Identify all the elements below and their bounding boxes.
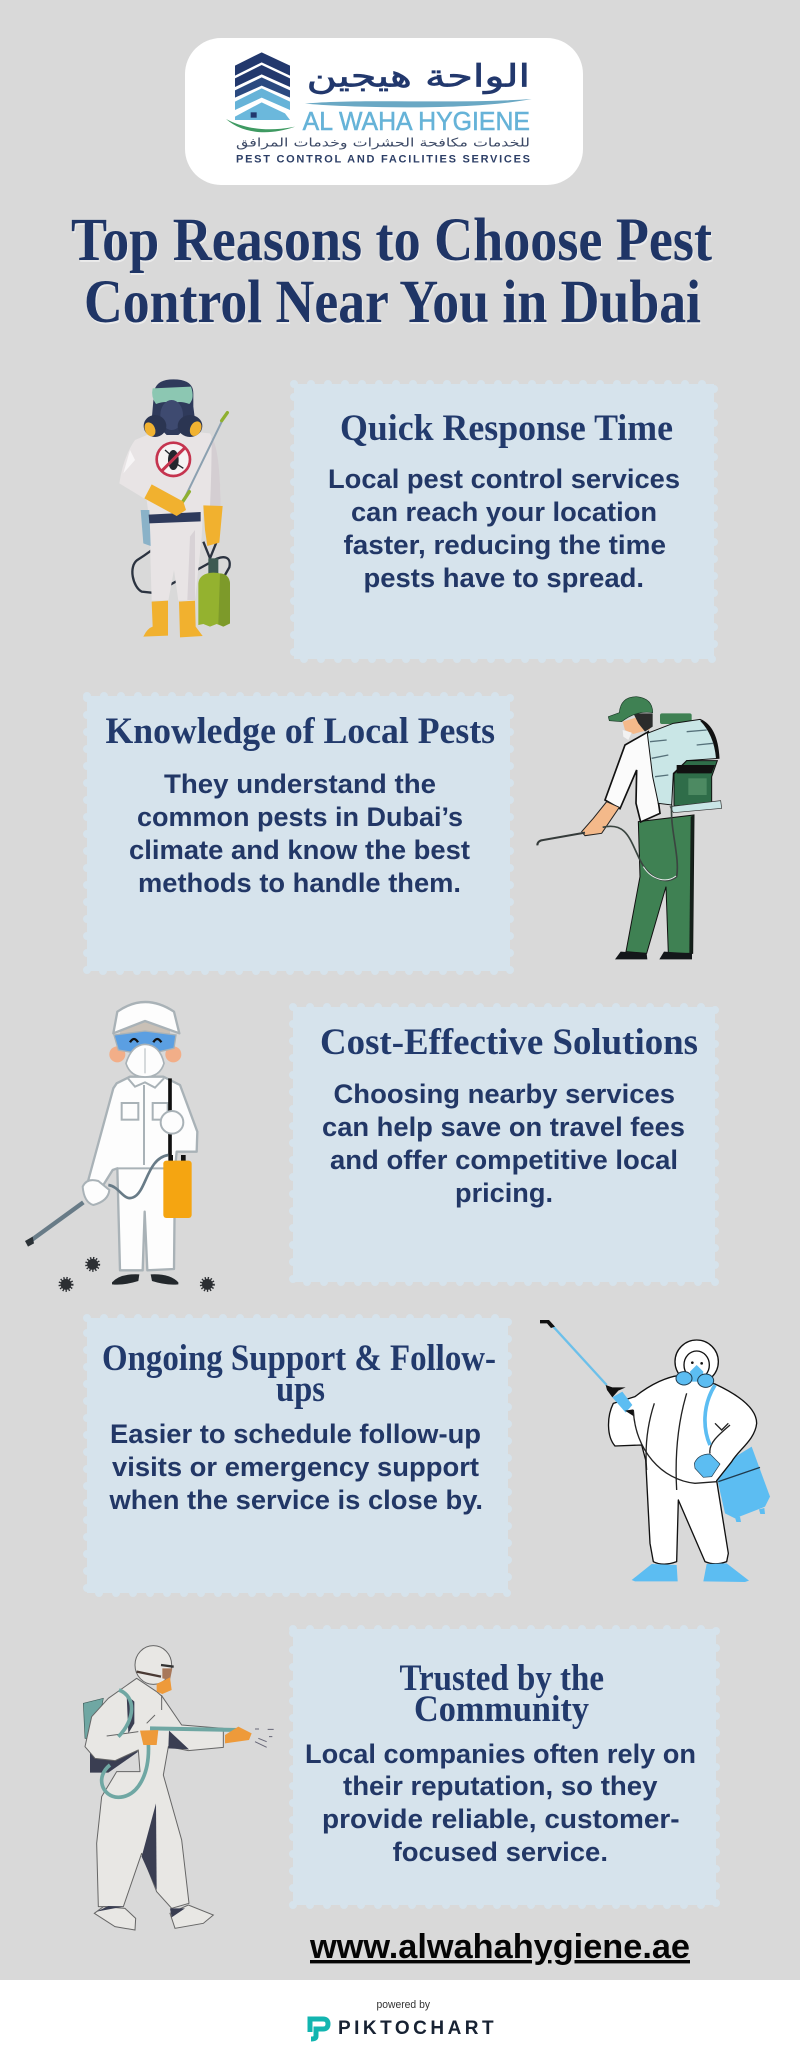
trousers and shoes — [615, 815, 694, 959]
suit detail lines — [646, 1393, 730, 1490]
text: cost-effective body: Choosing nearby services — [334, 1079, 675, 1109]
footer: powered by piktochart — [0, 1980, 800, 2060]
arm — [582, 802, 619, 836]
backpack tank — [647, 713, 722, 813]
text: local pests body: common pests in Dubai’s — [137, 802, 463, 832]
backpack — [83, 1698, 138, 1773]
shoe covers — [94, 1905, 213, 1930]
text: local pests body: climate and know the best — [129, 835, 470, 865]
logo english name: AL WAHA HYGIENE — [303, 106, 530, 136]
text: cost-effective body: and offer competitive local — [330, 1145, 678, 1175]
head — [135, 1646, 174, 1694]
text: trusted body: Local companies often rely on — [305, 1739, 696, 1769]
sleeve fold lines — [107, 1695, 162, 1736]
text: local pests body: They understand the — [164, 769, 436, 799]
no-bugs badge — [157, 443, 190, 476]
icon: piktochart mark — [310, 2019, 328, 2039]
text: cost-effective body: can help save on travel fees — [322, 1112, 685, 1142]
spray wand — [183, 413, 227, 502]
wand and hose — [537, 805, 677, 881]
shoes — [112, 1274, 178, 1285]
heading: quick response time: Quick Response Time — [340, 408, 673, 449]
text: trusted body: their reputation, so they — [343, 1771, 658, 1801]
shoe covers — [632, 1563, 749, 1582]
heading: ongoing support — [102, 1338, 496, 1410]
panel: trusted by the community — [293, 1629, 716, 1905]
heading: trusted by the community: Trusted by the — [400, 1658, 604, 1699]
bugs — [60, 1258, 214, 1291]
text: powered by: powered by — [376, 1999, 430, 2011]
title: Control Near You in Dubai — [84, 269, 701, 336]
gloves — [140, 1727, 252, 1745]
hose and wand — [102, 1690, 238, 1797]
text: ongoing support body: when the service is close by. — [108, 1485, 483, 1515]
text: trusted body — [305, 1739, 696, 1867]
logo tagline: PEST CONTROL AND FACILITIES SERVICES — [236, 153, 530, 165]
illustration: worker in white suit with orange tank — [25, 1002, 214, 1291]
panel: ongoing support and follow-ups — [87, 1318, 508, 1593]
gloves — [144, 484, 223, 546]
piktochart wordmark: PIKTOCHART — [338, 2018, 494, 2039]
illustration: worker with backpack sprayer — [537, 697, 722, 959]
text: ongoing support body: Easier to schedule follow-up — [110, 1419, 481, 1449]
logo swoosh — [305, 99, 532, 107]
text: cost-effective body: pricing. — [455, 1178, 553, 1208]
heading: ongoing support: ups — [276, 1369, 325, 1410]
wand — [25, 1078, 170, 1247]
suit details — [117, 1078, 175, 1168]
icon: building chevrons — [226, 52, 295, 132]
text: trusted body: provide reliable, customer- — [322, 1804, 680, 1834]
orange tank — [163, 1155, 192, 1218]
logo arabic name: الواحة هيجين — [307, 60, 530, 95]
heading: cost-effective solutions: Cost-Effective Solutions — [320, 1022, 698, 1063]
respirator and strap — [676, 1365, 715, 1445]
text: quick response body: can reach your location — [351, 497, 657, 527]
text: cost-effective body — [322, 1079, 685, 1208]
heading: trusted by the community: Community — [414, 1689, 589, 1730]
logo arabic subtitle: للخدمات مكافحة الحشرات وخدمات المرافق — [236, 136, 530, 151]
shirt — [605, 732, 660, 822]
text: quick response body: Local pest control services — [328, 464, 680, 494]
text: ongoing support body — [108, 1419, 483, 1515]
head — [109, 1002, 181, 1077]
text: local pests body — [129, 769, 470, 898]
logo badge — [185, 38, 583, 185]
text: ongoing support body: visits or emergency support — [112, 1452, 479, 1482]
text: local pests body: methods to handle them. — [138, 868, 461, 898]
head and cap — [608, 697, 653, 740]
hose and tank — [132, 522, 230, 627]
suit — [88, 1077, 197, 1270]
heading: knowledge of local pests: Knowledge of Local Pests — [106, 711, 495, 752]
title — [71, 207, 713, 336]
website url: www.alwahahygiene.ae — [309, 1928, 690, 1966]
text: quick response body — [328, 464, 680, 593]
spray droplets — [255, 1729, 274, 1747]
text: quick response body: faster, reducing the time — [344, 530, 666, 560]
gas mask — [142, 379, 204, 438]
belt and holster — [141, 510, 201, 546]
illustration: worker spraying to the right — [83, 1646, 274, 1930]
illustration: worker in white suit with blue bag — [540, 1320, 770, 1582]
text: trusted body: focused service. — [393, 1837, 608, 1867]
hood — [675, 1340, 718, 1383]
panel: cost-effective solutions — [293, 1007, 715, 1282]
boots — [143, 601, 203, 637]
bag — [717, 1447, 770, 1522]
title: Top Reasons to Choose Pest — [71, 207, 713, 274]
panel: quick response time — [294, 384, 714, 659]
suit body — [609, 1376, 757, 1564]
heading: trusted by the community — [400, 1658, 604, 1730]
spray wand and hose — [540, 1320, 717, 1483]
hand on bag — [694, 1454, 720, 1477]
hands — [83, 1111, 183, 1205]
hose — [108, 1155, 168, 1198]
suit — [119, 432, 221, 601]
text: quick response body: pests have to spread. — [364, 563, 644, 593]
panel: knowledge of local pests — [87, 696, 510, 971]
suit — [85, 1678, 223, 1908]
heading: ongoing support: Ongoing Support & Follow- — [102, 1338, 496, 1379]
illustration: worker in gas mask with green tank — [119, 379, 230, 637]
suit shadows — [127, 1695, 189, 1890]
